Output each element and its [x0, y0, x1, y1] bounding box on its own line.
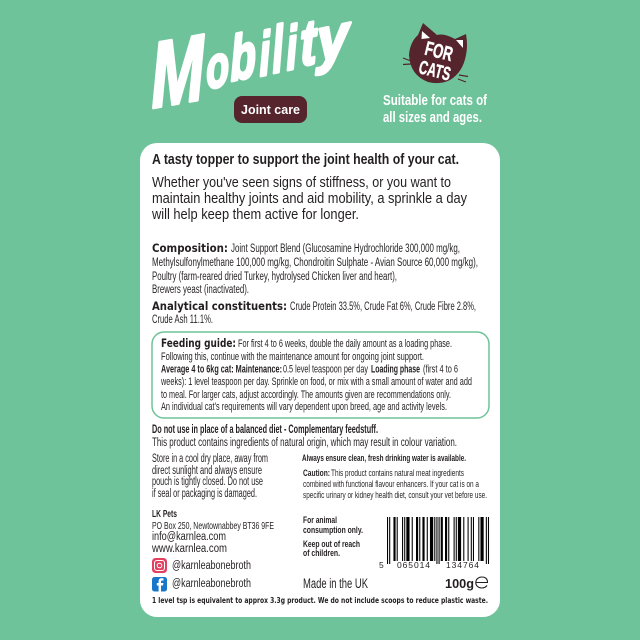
icon: facebook [152, 577, 167, 592]
panel: feeding guide: Following this, continue with the maintenance amount for ongoing joint support. [161, 351, 424, 363]
panel: feeding guide: An individual cat’s requirements will vary dependent upon breed, age and activity levels. [161, 401, 447, 413]
text block: balanced diet notice: Do not use in place of a balanced diet - Complementary feedstuff. [152, 424, 378, 436]
text block: analytical constituents: Crude Protein 33.5%, Crude Fat 6%, Crude Fibre 2.8%, [290, 301, 476, 313]
text: facebook handle: @karnleabonebroth [172, 578, 251, 590]
title: Mobility: M [149, 14, 207, 128]
text block: intro: maintain healthy joints and aid mobility, a sprinkle a day [152, 191, 468, 207]
icon: cat head, for cats: FOR [423, 38, 455, 66]
text block: contact details: www.karnlea.com [151, 543, 227, 555]
text block: animal consumption: consumption only. [303, 525, 363, 535]
text block: animal consumption [303, 515, 363, 558]
badge: Joint care [234, 96, 307, 123]
title: Mobility [149, 0, 353, 128]
panel: feeding guide: 0.5 level teaspoon per day [283, 364, 368, 376]
text block: water notice and caution: specific urinary or kidney health diet, consult your vet before use. [303, 490, 487, 501]
panel: feeding guide: Average 4 to 6kg cat: Maintenance: [161, 364, 282, 376]
barcode [379, 517, 489, 570]
title: Mobility: t [299, 6, 319, 80]
icon: instagram [152, 558, 167, 573]
text: made in the UK: Made in the UK [303, 576, 368, 591]
text block: storage: pouch is tightly closed. Do not use [152, 476, 263, 488]
text block: storage: direct sunlight and always ensure [152, 465, 262, 477]
title: Mobility: y [313, 0, 353, 76]
text: instagram handle: @karnleabonebroth [172, 560, 251, 572]
panel: feeding guide: Feeding guide: [161, 336, 236, 350]
text block: contact details: info@karnlea.com [152, 531, 226, 543]
text block: composition: Methylsulfonylmethane 100,000 mg/kg, Chondroitin Sulphate - Avian Source 60,000 mg/kg), [152, 257, 478, 269]
text block: contact details: LK Pets [152, 509, 177, 520]
text: footnote: 1 level tsp is equivalent to approx 3.3g product. We do not include scoops to reduce plastic waste. [152, 596, 488, 605]
text block: analytical constituents [152, 299, 476, 326]
text block: animal consumption: For animal [303, 515, 337, 525]
text block: composition: Poultry (farm-reared dried Turkey, hydrolysed Chicken liver and heart), [152, 271, 397, 283]
text block: composition: Brewers yeast (inactivated). [152, 284, 249, 296]
panel: feeding guide: Loading phase [371, 364, 420, 376]
text: suitable for cats: all sizes and ages. [383, 110, 482, 126]
text block: balanced diet notice [152, 424, 457, 449]
text block: animal consumption: Keep out of reach [303, 539, 360, 549]
panel: white information card [140, 143, 500, 617]
icon: estimated sign [476, 577, 488, 588]
title: Mobility: b [229, 19, 257, 95]
text: suitable for cats: Suitable for cats of [383, 93, 487, 109]
panel: feeding guide: to meal. For larger cats, adjust accordingly. The amounts given are recommendations only. [161, 389, 451, 401]
panel: feeding guide: For first 4 to 6 weeks, double the daily amount as a loading phase. [238, 338, 452, 350]
text block: composition: Composition: [152, 241, 228, 255]
text block: intro: will help keep them active for longer. [151, 207, 359, 223]
badge: Joint care: Joint care [241, 102, 300, 117]
title: Mobility: i [258, 18, 272, 89]
text block: storage [152, 453, 268, 500]
title: Mobility: o [205, 32, 230, 102]
icon: cat head, for cats: CATS [417, 57, 453, 86]
text: suitable for cats [383, 93, 487, 126]
text block: water notice and caution: combined with functional flavour enhancers. If your cat is on a [303, 479, 479, 490]
title: Mobility: l [271, 12, 285, 87]
text block: animal consumption: of children. [303, 548, 340, 558]
text block: water notice and caution: This product contains natural meat ingredients [331, 468, 464, 479]
text block: composition: Joint Support Blend (Glucosamine Hydrochloride 300,000 mg/kg, [231, 243, 460, 255]
text block: intro: Whether you've seen signs of stiffness, or you want to [152, 175, 451, 191]
icon: cat head, for cats [403, 23, 468, 86]
panel: feeding guide [152, 332, 489, 418]
text block: intro [151, 175, 468, 223]
text block: water notice and caution: Caution: [303, 468, 330, 479]
text block: composition [152, 241, 478, 296]
text block: analytical constituents: Analytical constituents: [152, 299, 287, 313]
title: Mobility: i [285, 12, 299, 83]
barcode: 134764 [446, 560, 479, 570]
panel: feeding guide: (first 4 to 6 [423, 364, 458, 376]
text block: storage: if seal or packaging is damaged. [152, 488, 257, 500]
text block: water notice and caution: Always ensure clean, fresh drinking water is available. [302, 453, 466, 464]
panel: feeding guide: weeks): 1 level teaspoon per day. Sprinkle on food, or mix with a small amount of water and add [160, 376, 472, 388]
barcode: 5 [379, 560, 384, 570]
text: net weight: 100g [445, 576, 474, 591]
text block: balanced diet notice: This product contains ingredients of natural origin, which may result in colour variation. [152, 437, 457, 449]
text block: storage: Store in a cool dry place, away from [152, 453, 268, 465]
text block: water notice and caution [302, 453, 487, 501]
text block: contact details: PO Box 250, Newtownabbey BT36 9FE [152, 521, 274, 532]
heading: tasty topper: A tasty topper to support the joint health of your cat. [152, 152, 459, 168]
barcode: 065014 [397, 560, 430, 570]
text block: analytical constituents: Crude Ash 11.1%. [152, 314, 213, 326]
text block: contact details [151, 509, 274, 555]
